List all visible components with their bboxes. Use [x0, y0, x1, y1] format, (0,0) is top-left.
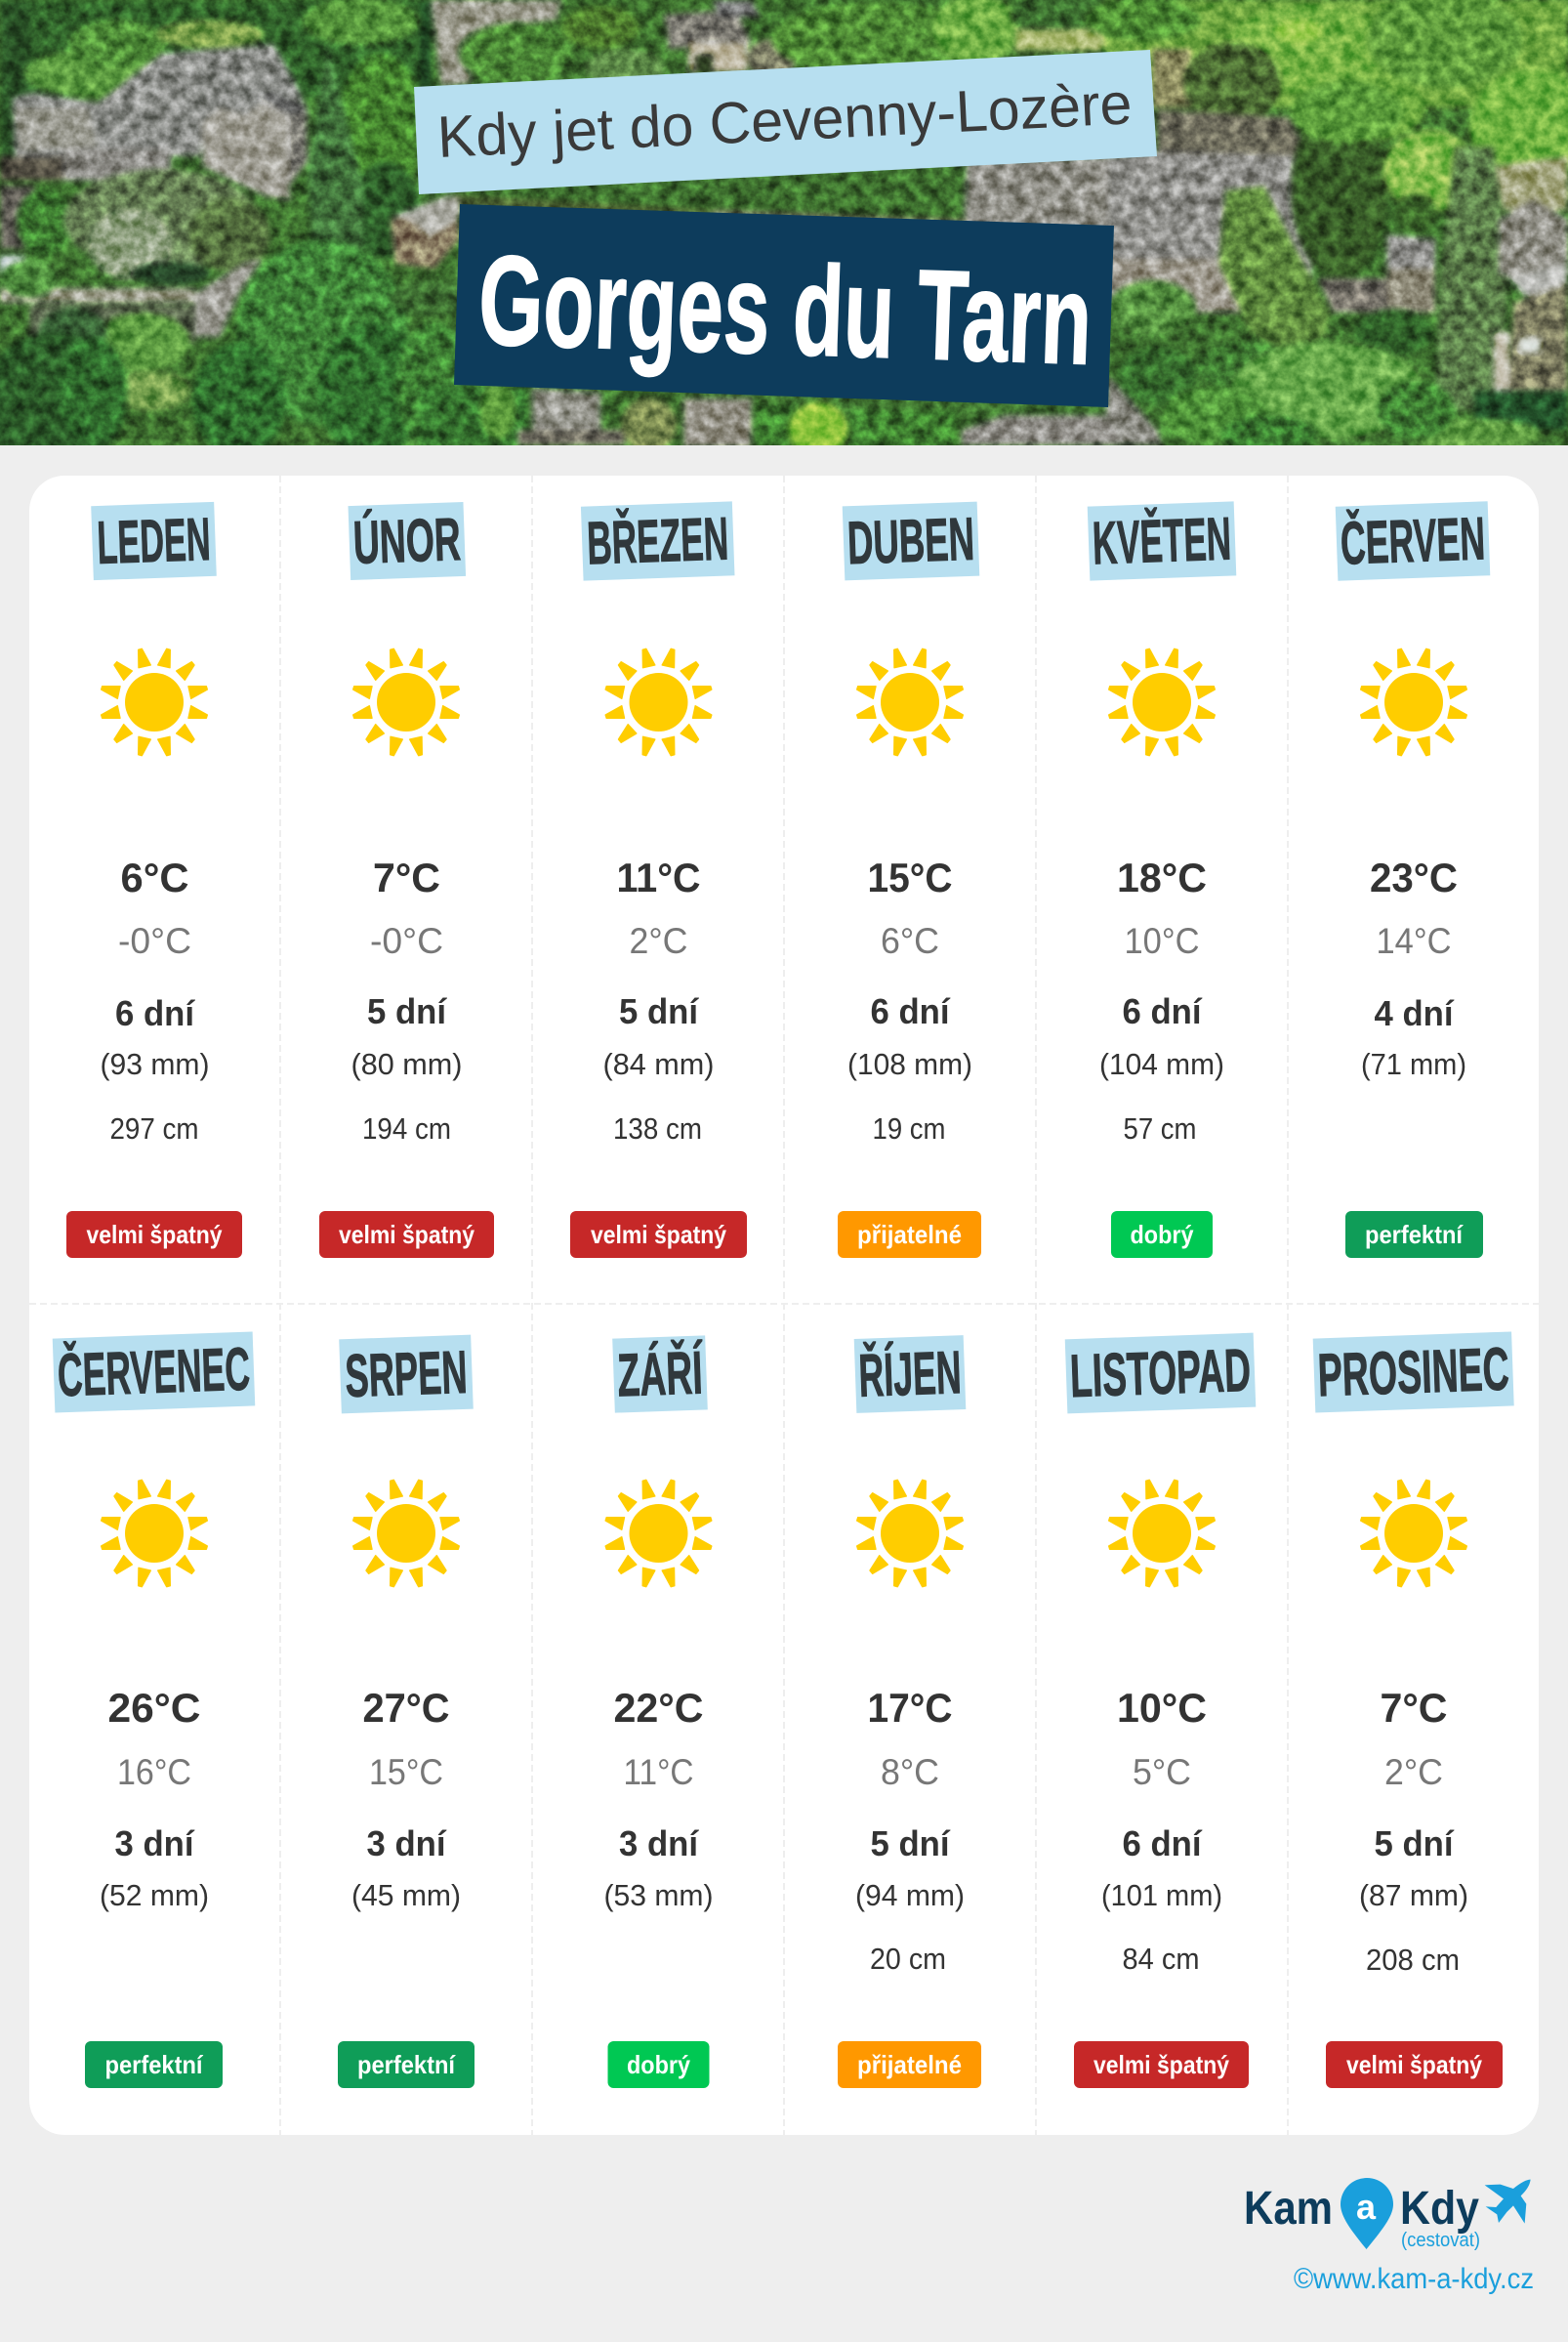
rain days: 6 dní	[1123, 991, 1202, 1031]
rain days: 3 dní	[367, 1823, 446, 1863]
snow depth: 297 cm	[109, 1111, 199, 1146]
rating badge: velmi špatný	[339, 1220, 475, 1249]
month heading: SRPEN	[344, 1339, 469, 1410]
cell: listopad	[1065, 1333, 1256, 2088]
icon: map pin	[1341, 2178, 1393, 2249]
rain days: 3 dní	[115, 1823, 194, 1863]
rating badge	[607, 2041, 709, 2088]
cell: červen	[1336, 501, 1490, 1258]
rainfall: (87 mm)	[1359, 1878, 1468, 1912]
cell: květen	[1088, 501, 1236, 1258]
low temperature: 6°C	[881, 921, 939, 961]
icon: sun	[102, 648, 207, 756]
rainfall: (52 mm)	[100, 1878, 209, 1912]
rainfall: (108 mm)	[847, 1047, 972, 1081]
month heading	[581, 501, 734, 581]
rainfall: (84 mm)	[603, 1047, 715, 1081]
snow depth: 194 cm	[362, 1111, 451, 1146]
low temperature: 10°C	[1125, 921, 1199, 961]
low temperature: 5°C	[1133, 1752, 1191, 1792]
rating badge: velmi špatný	[591, 1220, 726, 1249]
icon: sun	[857, 1480, 963, 1587]
wordmark: Kam: Kam	[1244, 2183, 1333, 2235]
high temperature: 15°C	[867, 855, 953, 900]
rating badge	[1074, 2041, 1249, 2088]
rain days: 5 dní	[871, 1823, 950, 1863]
rating badge: perfektní	[105, 2050, 203, 2079]
snow depth: 20 cm	[870, 1942, 946, 1976]
high temperature: 18°C	[1117, 855, 1207, 900]
icon: sun	[1109, 648, 1215, 756]
rainfall: (94 mm)	[855, 1878, 965, 1912]
month heading	[53, 1331, 255, 1413]
low temperature: 15°C	[369, 1752, 443, 1792]
rating badge	[85, 2041, 223, 2088]
icon: sun	[605, 1480, 712, 1587]
rating badge	[1111, 1211, 1213, 1258]
rainfall: (93 mm)	[100, 1047, 209, 1081]
rain days: 6 dní	[115, 993, 195, 1033]
rain days: 6 dní	[871, 991, 950, 1031]
rain days: 5 dní	[367, 991, 447, 1031]
month heading: DUBEN	[846, 506, 975, 577]
wordmark: Kdy: Kdy	[1400, 2183, 1479, 2235]
rainfall: (80 mm)	[351, 1047, 463, 1081]
rating badge	[338, 2041, 475, 2088]
month heading: LISTOPAD	[1069, 1337, 1252, 1410]
logo: Kam a Kdy	[1244, 2178, 1531, 2251]
subtitle banner	[414, 50, 1157, 194]
rain days: 6 dní	[1123, 1823, 1202, 1863]
cell: duben	[838, 502, 981, 1258]
month heading: ÚNOR	[352, 506, 462, 577]
icon: plane	[1485, 2180, 1531, 2224]
low temperature: 11°C	[623, 1752, 693, 1792]
cell: červenec	[53, 1331, 255, 2088]
cell: září	[603, 1335, 713, 2088]
rating badge: dobrý	[1131, 1220, 1194, 1249]
month heading: ČERVENEC	[57, 1336, 251, 1409]
rating badge	[1326, 2041, 1503, 2088]
cell: srpen	[338, 1335, 475, 2088]
rating badge: přijatelné	[857, 1220, 962, 1249]
high temperature: 10°C	[1117, 1685, 1207, 1731]
tagline: (cestovat)	[1401, 2230, 1480, 2251]
title banner	[454, 204, 1114, 407]
low temperature: -0°C	[118, 921, 191, 961]
rating badge	[319, 1211, 494, 1258]
icon: sun	[353, 1480, 459, 1587]
high temperature: 23°C	[1370, 855, 1458, 900]
cell: říjen	[838, 1335, 981, 2088]
high temperature: 17°C	[867, 1685, 953, 1731]
high temperature: 27°C	[363, 1685, 449, 1731]
cell: prosinec	[1313, 1331, 1514, 2088]
month heading	[612, 1335, 708, 1413]
rain days: 4 dní	[1375, 993, 1454, 1033]
low temperature: 2°C	[629, 921, 687, 961]
rainfall: (71 mm)	[1361, 1047, 1466, 1081]
icon: sun	[353, 648, 459, 756]
rating badge: dobrý	[627, 2050, 690, 2079]
rainfall: (104 mm)	[1099, 1047, 1224, 1081]
website credit: ©www.kam-a-kdy.cz	[1294, 2263, 1534, 2295]
rating badge: velmi špatný	[86, 1220, 223, 1249]
icon: sun	[605, 648, 712, 756]
high temperature: 22°C	[613, 1685, 703, 1731]
month heading	[339, 1335, 474, 1413]
month heading: BŘEZEN	[586, 505, 729, 578]
pin letter: a	[1356, 2187, 1377, 2227]
low temperature: -0°C	[370, 921, 443, 961]
snow depth: 84 cm	[1123, 1942, 1199, 1976]
cell: leden	[66, 502, 242, 1258]
month heading	[843, 502, 979, 580]
month heading: LEDEN	[96, 506, 212, 577]
rainfall: (101 mm)	[1101, 1878, 1222, 1912]
month heading	[1065, 1333, 1256, 1413]
cell: březen	[570, 501, 747, 1258]
rating badge: velmi špatný	[1093, 2050, 1229, 2079]
low temperature: 14°C	[1377, 921, 1451, 961]
panel: monthly table card	[29, 476, 1539, 2135]
month heading	[854, 1335, 966, 1413]
month heading: KVĚTEN	[1092, 506, 1232, 577]
rating badge	[838, 1211, 981, 1258]
month heading	[349, 502, 466, 580]
cell: únor	[319, 502, 494, 1258]
icon: sun	[1361, 1480, 1466, 1587]
title banner: Gorges du Tarn	[476, 228, 1094, 392]
snow depth: 57 cm	[1123, 1111, 1197, 1146]
month heading	[91, 502, 217, 580]
low temperature: 16°C	[117, 1752, 191, 1792]
high temperature: 11°C	[617, 855, 701, 900]
snow depth: 19 cm	[873, 1111, 945, 1146]
snow depth: 138 cm	[613, 1111, 702, 1146]
rainfall: (53 mm)	[603, 1878, 713, 1912]
rain days: 3 dní	[619, 1823, 699, 1863]
rating badge: perfektní	[1365, 1220, 1464, 1249]
month heading	[1336, 501, 1490, 581]
snow depth: 208 cm	[1366, 1943, 1460, 1977]
hero photo: Gorges du Tarn village	[0, 0, 1568, 469]
rating badge	[1345, 1211, 1483, 1258]
rating badge	[838, 2041, 981, 2088]
icon: sun	[857, 648, 963, 756]
rating badge	[66, 1211, 242, 1258]
high temperature: 6°C	[121, 855, 189, 900]
high temperature: 7°C	[1381, 1685, 1447, 1731]
month heading: ŘÍJEN	[857, 1339, 963, 1410]
low temperature: 2°C	[1384, 1752, 1443, 1792]
low temperature: 8°C	[881, 1752, 939, 1792]
rain days: 5 dní	[619, 991, 699, 1031]
rainfall: (45 mm)	[351, 1878, 461, 1912]
icon: sun	[102, 1480, 207, 1587]
subtitle banner: Kdy jet do Cevenny-Lozère	[435, 70, 1134, 170]
icon: sun	[1361, 648, 1466, 756]
rating badge: perfektní	[357, 2050, 456, 2079]
high temperature: 26°C	[107, 1685, 201, 1731]
rain days: 5 dní	[1375, 1823, 1454, 1863]
rating badge: velmi špatný	[1346, 2050, 1482, 2079]
high temperature: 7°C	[373, 855, 440, 900]
rating badge: přijatelné	[857, 2050, 962, 2079]
icon: sun	[1109, 1480, 1215, 1587]
month heading	[1088, 501, 1236, 581]
rating badge	[570, 1211, 747, 1258]
month heading: ZÁŘÍ	[616, 1339, 705, 1409]
